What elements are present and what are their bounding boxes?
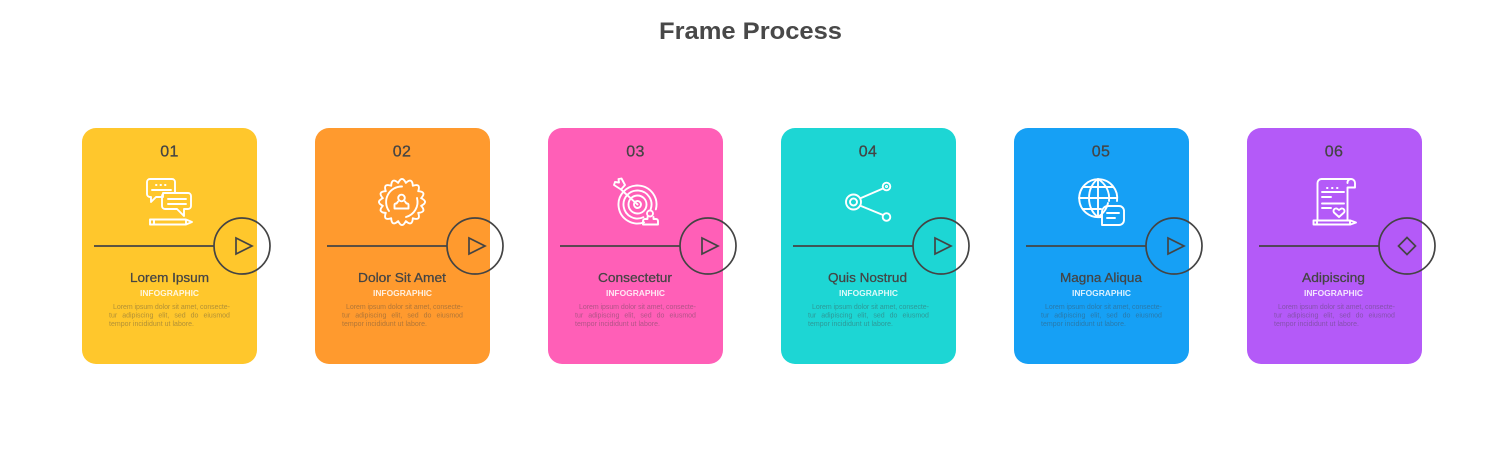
step subheading: INFOGRAPHIC (1072, 289, 1131, 298)
step number: 04 (859, 144, 877, 160)
step heading: Lorem Ipsum (130, 271, 209, 285)
panel: step 06 (1247, 128, 1435, 364)
step subheading: INFOGRAPHIC (373, 289, 432, 298)
card background (548, 128, 723, 364)
card background (1014, 128, 1189, 364)
title: Frame Process (659, 18, 842, 45)
description: Lorem ipsum dolor sit amet, consecte- (113, 304, 231, 311)
description (575, 304, 697, 328)
description: Lorem ipsum dolor sit amet, consecte- (812, 304, 930, 311)
description: tempor incididunt ut labore. (1041, 321, 1126, 328)
description: tur adipiscing elit, sed do eiusmod (109, 312, 230, 320)
card background (315, 128, 490, 364)
card background (1247, 128, 1422, 364)
description: Lorem ipsum dolor sit amet, consecte- (1045, 304, 1163, 311)
description: tempor incididunt ut labore. (808, 321, 893, 328)
description (1041, 304, 1163, 328)
description (109, 304, 231, 328)
card background (82, 128, 257, 364)
description: Lorem ipsum dolor sit amet, consecte- (1278, 304, 1396, 311)
panel: step 02 (315, 128, 503, 364)
step number: 03 (626, 144, 645, 160)
icon: globe with chat bubble (1079, 179, 1124, 225)
icon: share nodes (846, 183, 890, 221)
timeline arrow (560, 218, 736, 274)
card background (781, 128, 956, 364)
step heading: Magna Aliqua (1060, 271, 1142, 285)
step heading: Consectetur (598, 271, 672, 285)
description: tur adipiscing elit, sed do eiusmod (1041, 312, 1162, 320)
step subheading: INFOGRAPHIC (140, 289, 199, 298)
panel: step 03 (548, 128, 736, 364)
step number: 01 (160, 144, 179, 160)
description: tur adipiscing elit, sed do eiusmod (575, 312, 696, 320)
description: tempor incididunt ut labore. (1274, 321, 1359, 328)
step number: 02 (393, 144, 411, 160)
description: Lorem ipsum dolor sit amet, consecte- (346, 304, 464, 311)
step number: 05 (1092, 144, 1110, 160)
description (808, 304, 930, 328)
timeline arrow (94, 218, 270, 274)
step subheading: INFOGRAPHIC (839, 289, 898, 298)
timeline arrow (793, 218, 969, 274)
description: tur adipiscing elit, sed do eiusmod (1274, 312, 1395, 320)
step heading: Dolor Sit Amet (358, 271, 447, 285)
timeline arrow (1026, 218, 1202, 274)
timeline diamond (1259, 218, 1435, 274)
step subheading: INFOGRAPHIC (606, 289, 665, 298)
icon: badge with person (379, 179, 425, 225)
panel: step 05 (1014, 128, 1202, 364)
step number: 06 (1325, 144, 1343, 160)
icon: scroll with heart and pencil (1314, 179, 1356, 224)
panel: step 01 (82, 128, 270, 364)
description: tempor incididunt ut labore. (109, 321, 194, 328)
icon: chat bubbles and pencil (147, 179, 192, 224)
description: tempor incididunt ut labore. (575, 321, 660, 328)
timeline arrow (327, 218, 503, 274)
description (342, 304, 464, 328)
description: tur adipiscing elit, sed do eiusmod (342, 312, 463, 320)
panel: step 04 (781, 128, 969, 364)
step subheading: INFOGRAPHIC (1304, 289, 1363, 298)
description: tur adipiscing elit, sed do eiusmod (808, 312, 929, 320)
description (1274, 304, 1396, 328)
icon: target with arrow and person (614, 178, 658, 224)
step heading: Quis Nostrud (828, 271, 907, 285)
description: tempor incididunt ut labore. (342, 321, 427, 328)
step heading: Adipiscing (1302, 271, 1365, 285)
description: Lorem ipsum dolor sit amet, consecte- (579, 304, 697, 311)
